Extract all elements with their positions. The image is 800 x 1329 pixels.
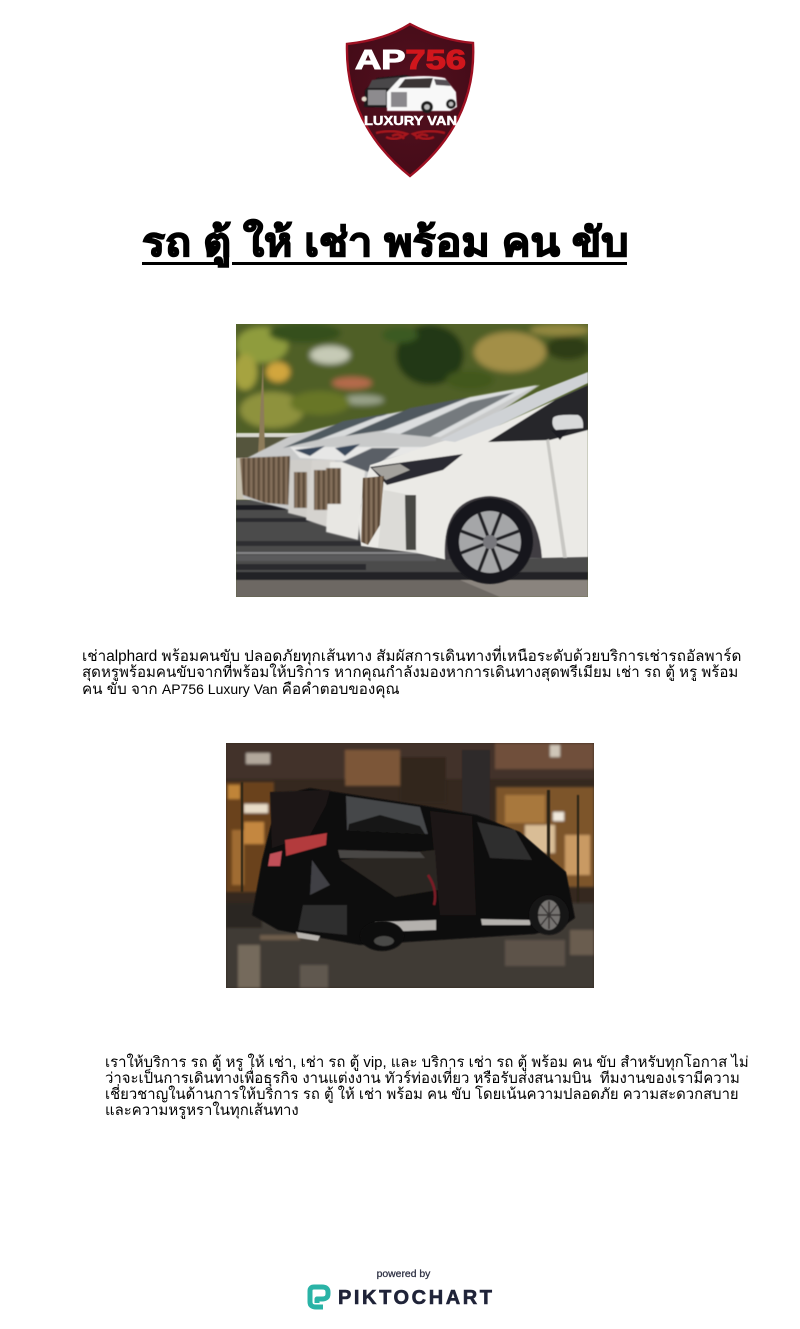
pavement — [236, 500, 588, 597]
logo tagline: LUXURY VAN — [364, 114, 457, 128]
building background — [226, 743, 594, 892]
paragraph: service text: ว่าจะเป็นการเดินทางเพื่อธุรกิจ งานแต่งงาน ทัวร์ท่องเที่ยว หรือรับส่งสนามบิน ทีมงานของเรามีความ — [105, 1070, 740, 1087]
black van body — [252, 788, 575, 945]
paragraph: intro text: สุดหรูพร้อมคนขับจากที่พร้อมให้บริการ หากคุณกำลังมองหาการเดินทางสุดพรีเมียม เช่า รถ ตู้ หรู พร้อม — [82, 664, 738, 681]
logo: AP756 Luxury Van shield — [346, 22, 474, 178]
paragraph: intro text: คน ขับ จาก AP756 Luxury Van คือคำตอบของคุณ — [82, 681, 400, 698]
receding vans — [240, 385, 540, 540]
paragraph: service text — [105, 1054, 749, 1119]
wet floor — [226, 903, 594, 988]
front van — [358, 372, 588, 560]
van wheels — [360, 895, 569, 951]
shield body — [347, 24, 473, 176]
icon: Piktochart mark — [310, 1287, 328, 1307]
paragraph: service text: เราให้บริการ รถ ตู้ หรู ให้ เช่า, เช่า รถ ตู้ vip, และ บริการ เช่า รถ ตู้ พร้อม คน ขับ สำหรับทุกโอกาส ไม่ — [105, 1054, 749, 1071]
photo: row of white vans — [236, 324, 588, 597]
logo vans — [362, 75, 457, 113]
Piktochart wordmark: PIKTOCHART — [338, 1287, 493, 1309]
pillar — [462, 750, 490, 820]
logo wordmark: AP 756 — [355, 44, 466, 75]
logo ornament — [376, 131, 445, 139]
distant fence and trunk — [236, 360, 308, 500]
photo: black van at night — [226, 743, 594, 988]
front wheel — [447, 498, 533, 584]
paragraph: service text: เชี่ยวชาญในด้านการให้บริการ รถ ตู้ ให้ เช่า พร้อม คน ขับ โดยเน้นความปลอดภัย ความสะดวกสบาย — [105, 1087, 739, 1103]
powered by label: powered by — [377, 1269, 431, 1280]
storefront mullions — [241, 782, 579, 905]
title: รถ ตู้ ให้ เช่า พร้อม คน ขับ — [142, 221, 629, 265]
paragraph: intro text — [82, 645, 741, 698]
footer: powered by Piktochart — [308, 1269, 493, 1310]
paragraph: intro text: เช่าalphard พร้อมคนขับ ปลอดภัยทุกเส้นทาง สัมผัสการเดินทางที่เหนือระดับด้วยบริการเช่ารถอัลพาร์ด — [82, 648, 741, 665]
foliage background — [233, 323, 590, 444]
paragraph: service text: และความหรูหราในทุกเส้นทาง — [105, 1102, 299, 1119]
